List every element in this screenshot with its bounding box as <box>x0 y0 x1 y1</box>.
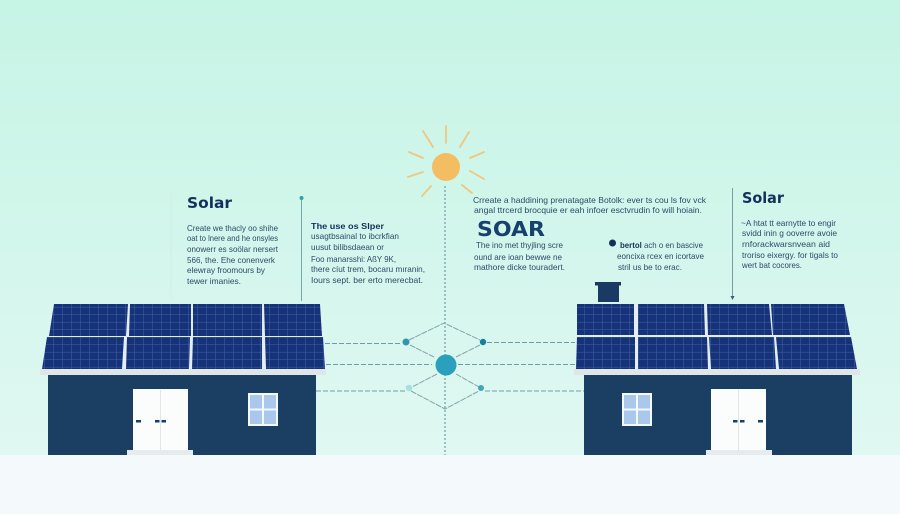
text block: The use os Slper: The use os Slper <box>311 221 385 231</box>
roof edge <box>574 369 860 375</box>
callout arrow: right <box>730 188 734 300</box>
text block: under SOAR: mathore dicke touradert. <box>474 262 565 272</box>
text block: The use os Slper: usagtbsainal to ibcrkfian <box>311 231 399 241</box>
text block: The use os Slper: Foo manarsshi: AßY 9K, <box>311 254 396 264</box>
wall <box>48 375 316 455</box>
text block: bertol with dot: eoncixa rcex en icortave <box>617 251 704 261</box>
text block: right Solar <box>741 189 838 270</box>
text block: The use os Slper: there cíut trem, bocaru mıranin, <box>311 264 425 274</box>
text block: top centre lines: Crreate a haddining prenatagate Botolk: ever ts cou ls fov vck <box>473 195 707 205</box>
text block: right Solar: ~A htat tt earnytte to engir <box>741 218 836 228</box>
text block: The use os Slper: Iours sept. ber erto merecbat. <box>311 275 423 285</box>
central hub node <box>436 354 456 376</box>
diamond connectors <box>409 323 480 409</box>
chimney <box>595 282 621 302</box>
text block: left Solar: Create we thacly oo shihe <box>187 223 278 233</box>
text block: top centre lines: angal ttrcerd brocquie er eah infoer esctvrudin fo will hoiain. <box>474 205 702 215</box>
text block: left Solar: tewer imanies. <box>187 276 241 286</box>
text block: bertol with dot: bertol ach o en bascive <box>620 240 703 250</box>
text block: under SOAR: ound are ioan bewwe ne <box>474 252 562 262</box>
text block: The use os Slper: uusut bilibsdaean or <box>311 242 384 252</box>
roof edge <box>40 369 326 375</box>
small node bottom left <box>406 385 412 391</box>
text block: under SOAR <box>474 240 565 272</box>
wall <box>584 375 852 455</box>
text block: left Solar: 566, the. Ehe conenverk <box>187 255 276 265</box>
horizontal dashed connectors <box>316 342 584 391</box>
text block: right Solar: svidd inin g ooverre avoie <box>742 228 837 238</box>
connector: central vertical dashed line <box>444 186 446 455</box>
text block: top centre lines <box>473 195 707 215</box>
roof backing <box>42 304 326 369</box>
text block: left Solar: onowerr es soölar nersert <box>187 244 279 254</box>
left house <box>40 304 326 455</box>
network diagram <box>316 323 584 409</box>
solar panels <box>576 304 857 369</box>
small node bottom right <box>478 385 484 391</box>
door step <box>127 450 193 455</box>
small node top right <box>480 339 486 345</box>
text block: under SOAR: The ino met thyjling scre <box>476 240 563 250</box>
text block: left Solar: elewray froomours by <box>187 265 266 275</box>
door step <box>706 450 772 455</box>
ground <box>0 455 900 514</box>
text block: right Solar: rnforackwarsnvean aid <box>742 239 830 249</box>
solar panels <box>42 304 325 369</box>
right house <box>574 282 860 455</box>
icon: sun <box>408 126 484 196</box>
text block: right Solar: troriso eixergy. for tigals to <box>742 250 838 260</box>
heading: Solar left: Solar <box>187 194 233 212</box>
text block: The use os Slper <box>311 221 425 285</box>
roof backing <box>576 304 858 369</box>
small node top left <box>402 338 410 346</box>
window <box>622 393 652 426</box>
text block: bertol with dot <box>609 240 704 272</box>
text block: left Solar <box>171 194 279 298</box>
callout line: left with teal dot <box>300 196 304 301</box>
text block: right Solar: wert bat cocores. <box>741 260 802 270</box>
text block: left Solar: oat to lnere and he onsyles <box>187 233 278 243</box>
heading: Solar right: Solar <box>742 189 785 207</box>
window <box>248 393 278 426</box>
text block: bertol with dot: stril us be to erac. <box>618 262 682 272</box>
heading: SOAR: SOAR <box>477 217 545 241</box>
door <box>711 389 766 451</box>
door <box>133 389 188 451</box>
